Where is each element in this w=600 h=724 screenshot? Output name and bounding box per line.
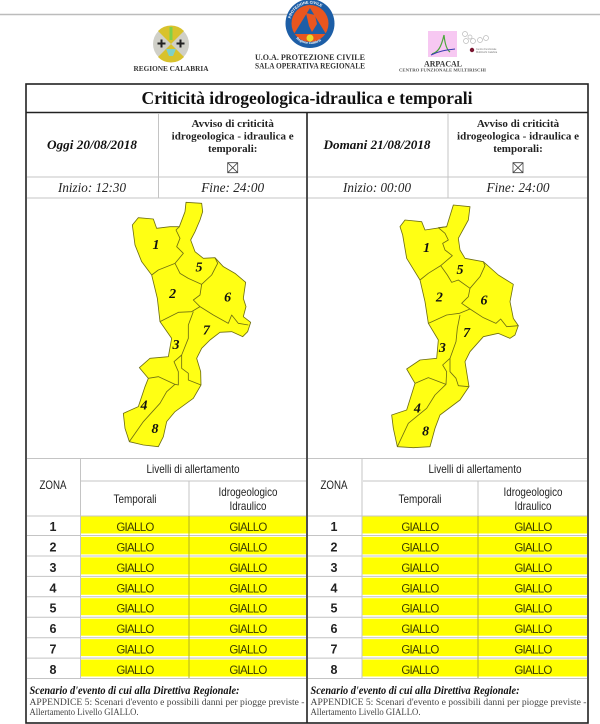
map: Calabria tomorrow: 6 (480, 294, 487, 309)
map: Calabria tomorrow: 1 (423, 241, 430, 256)
table: alert levels today: GIALLO (116, 604, 154, 616)
table: alert levels today: GIALLO (229, 563, 267, 575)
date: tomorrow: Domani 21/08/2018 (322, 137, 431, 152)
panel: tomorrow (308, 113, 587, 717)
panel: today (27, 113, 306, 717)
table: alert levels tomorrow: 3 (331, 561, 338, 575)
table: alert levels tomorrow: 5 (331, 602, 338, 616)
map: Calabria today (123, 202, 251, 447)
table: alert levels tomorrow: GIALLO (401, 583, 439, 595)
scenario: today: APPENDICE 5: Scenari d'evento e possibili danni per piogge previste - (30, 697, 304, 707)
end time: tomorrow: Fine: 24:00 (486, 181, 550, 196)
table: alert levels tomorrow: GIALLO (401, 522, 439, 534)
table: alert levels tomorrow: Livelli di allertamento (428, 462, 522, 476)
map: Calabria today: 5 (195, 260, 202, 275)
table: alert levels today: Idrogeologico (218, 485, 278, 499)
notice: today: temporali: (208, 143, 257, 155)
organisation name: SALA OPERATIVA REGIONALE (255, 62, 365, 70)
map: Calabria tomorrow (392, 205, 518, 448)
table: alert levels tomorrow: 1 (331, 520, 338, 534)
table: alert levels today: 5 (50, 602, 57, 616)
table: alert levels today: Livelli di allertamento (146, 462, 240, 476)
table: alert levels tomorrow: GIALLO (401, 645, 439, 657)
date: today: Oggi 20/08/2018 (47, 137, 137, 152)
table: alert levels today: GIALLO (229, 604, 267, 616)
table: alert levels today: GIALLO (116, 583, 154, 595)
notice: tomorrow (457, 118, 579, 173)
table: alert levels tomorrow: 4 (331, 581, 338, 595)
table: alert levels tomorrow: 8 (331, 663, 338, 677)
scenario: today: Scenario d'evento di cui alla Direttiva Regionale: (30, 685, 240, 697)
table: alert levels today: GIALLO (229, 665, 267, 677)
map: Calabria tomorrow: 5 (456, 263, 463, 278)
table: alert levels today: GIALLO (116, 645, 154, 657)
table: alert levels tomorrow: Temporali (398, 492, 442, 506)
table: alert levels tomorrow: GIALLO (401, 665, 439, 677)
table: alert levels today: GIALLO (116, 624, 154, 636)
table: alert levels tomorrow: GIALLO (514, 542, 552, 554)
map: Calabria today: 6 (224, 290, 231, 305)
table: alert levels today: ZONA (40, 478, 66, 492)
scenario: today (30, 685, 304, 717)
notice: today (172, 118, 294, 173)
logo: Protezione Civile: PROTEZIONE CIVILE (288, 0, 322, 18)
organisation name (255, 53, 365, 70)
start time: today: Inizio: 12:30 (57, 181, 126, 196)
map: Calabria today: 4 (139, 399, 147, 414)
table: alert levels tomorrow: GIALLO (401, 604, 439, 616)
logo: ARPACAL: CENTRO FUNZIONALE MULTIRISCHI (399, 68, 486, 72)
scenario: tomorrow: Scenario d'evento di cui alla Direttiva Regionale: (310, 685, 520, 697)
table: alert levels tomorrow: GIALLO (514, 583, 552, 595)
map: Calabria tomorrow: 2 (435, 290, 443, 305)
table: alert levels today: Idraulico (230, 499, 267, 513)
logo: Regione Calabria (134, 25, 209, 73)
scenario: tomorrow: APPENDICE 5: Scenari d'evento e possibili danni per piogge previste - (310, 697, 586, 707)
table: alert levels today: 2 (50, 540, 57, 554)
table: alert levels today: 4 (50, 581, 57, 595)
table: alert levels tomorrow: GIALLO (514, 522, 552, 534)
scenario: tomorrow: Allertamento Livello GIALLO. (310, 707, 420, 717)
table: alert levels tomorrow: GIALLO (401, 542, 439, 554)
table: alert levels tomorrow: Idrogeologico (504, 485, 563, 499)
map: Calabria today: 3 (171, 338, 179, 353)
table: alert levels today: 7 (50, 643, 57, 657)
table: alert levels today: GIALLO (116, 542, 154, 554)
table: alert levels tomorrow: GIALLO (514, 624, 552, 636)
table: alert levels today: GIALLO (116, 522, 154, 534)
map: Calabria tomorrow: 7 (463, 326, 471, 341)
scenario: tomorrow (310, 685, 586, 717)
table: alert levels tomorrow: GIALLO (514, 665, 552, 677)
logo: ARPACAL: ARPACAL (424, 60, 462, 68)
table: alert levels today: GIALLO (229, 542, 267, 554)
end time: today: Fine: 24:00 (200, 181, 264, 196)
map: Calabria today: 8 (151, 422, 158, 437)
table: alert levels today: GIALLO (229, 624, 267, 636)
map: Calabria tomorrow: 3 (438, 341, 446, 356)
table: alert levels today: 8 (50, 663, 57, 677)
table: alert levels tomorrow: GIALLO (514, 604, 552, 616)
table: alert levels tomorrow: 2 (331, 540, 338, 554)
table: alert levels tomorrow: 6 (331, 622, 338, 636)
table: alert levels tomorrow (308, 462, 587, 678)
table: alert levels tomorrow: GIALLO (401, 624, 439, 636)
notice: today: idrogeologica - idraulica e (172, 130, 294, 142)
table: alert levels tomorrow: Idraulico (514, 499, 552, 513)
organisation name: U.O.A. PROTEZIONE CIVILE (255, 53, 365, 62)
table: alert levels tomorrow: 7 (331, 643, 338, 657)
map: Calabria tomorrow: 8 (422, 425, 429, 440)
table: alert levels today: GIALLO (116, 665, 154, 677)
title: Criticità idrogeologica-idraulica e temporali (142, 88, 473, 108)
table: alert levels tomorrow: GIALLO (514, 563, 552, 575)
map: Calabria today: 1 (152, 238, 159, 253)
table: alert levels today: 1 (50, 520, 57, 534)
map: Calabria tomorrow: 4 (413, 401, 421, 416)
table: alert levels today (27, 462, 306, 678)
logo: Protezione Civile (286, 0, 334, 48)
map: Calabria today: 7 (203, 324, 211, 339)
table: alert levels tomorrow: GIALLO (514, 645, 552, 657)
table: alert levels today: GIALLO (229, 583, 267, 595)
table: alert levels today: 6 (50, 622, 57, 636)
start time: tomorrow: Inizio: 00:00 (342, 181, 411, 196)
notice: tomorrow: temporali: (493, 143, 543, 155)
logo: ARPACAL (399, 31, 498, 72)
table: alert levels today: GIALLO (116, 563, 154, 575)
scenario: today: Allertamento Livello GIALLO. (30, 707, 138, 717)
logo: ARPACAL: Centro Funzionale (476, 48, 497, 51)
table: alert levels today: GIALLO (229, 522, 267, 534)
notice: tomorrow: idrogeologica - idraulica e (457, 130, 579, 142)
notice: today: Avviso di criticità (192, 118, 274, 130)
logo: Regione Calabria: REGIONE CALABRIA (134, 64, 209, 73)
table: alert levels tomorrow: GIALLO (401, 563, 439, 575)
table: alert levels today: GIALLO (229, 645, 267, 657)
logo: ARPACAL: Multirischi Calabria (476, 51, 498, 54)
map: Calabria today: 2 (168, 287, 176, 302)
logo: Protezione Civile: Regione Calabria (296, 37, 322, 44)
table: alert levels tomorrow: ZONA (320, 478, 348, 492)
table: alert levels today: Temporali (114, 492, 156, 506)
notice: tomorrow: Avviso di criticità (477, 118, 560, 130)
table: alert levels today: 3 (50, 561, 57, 575)
